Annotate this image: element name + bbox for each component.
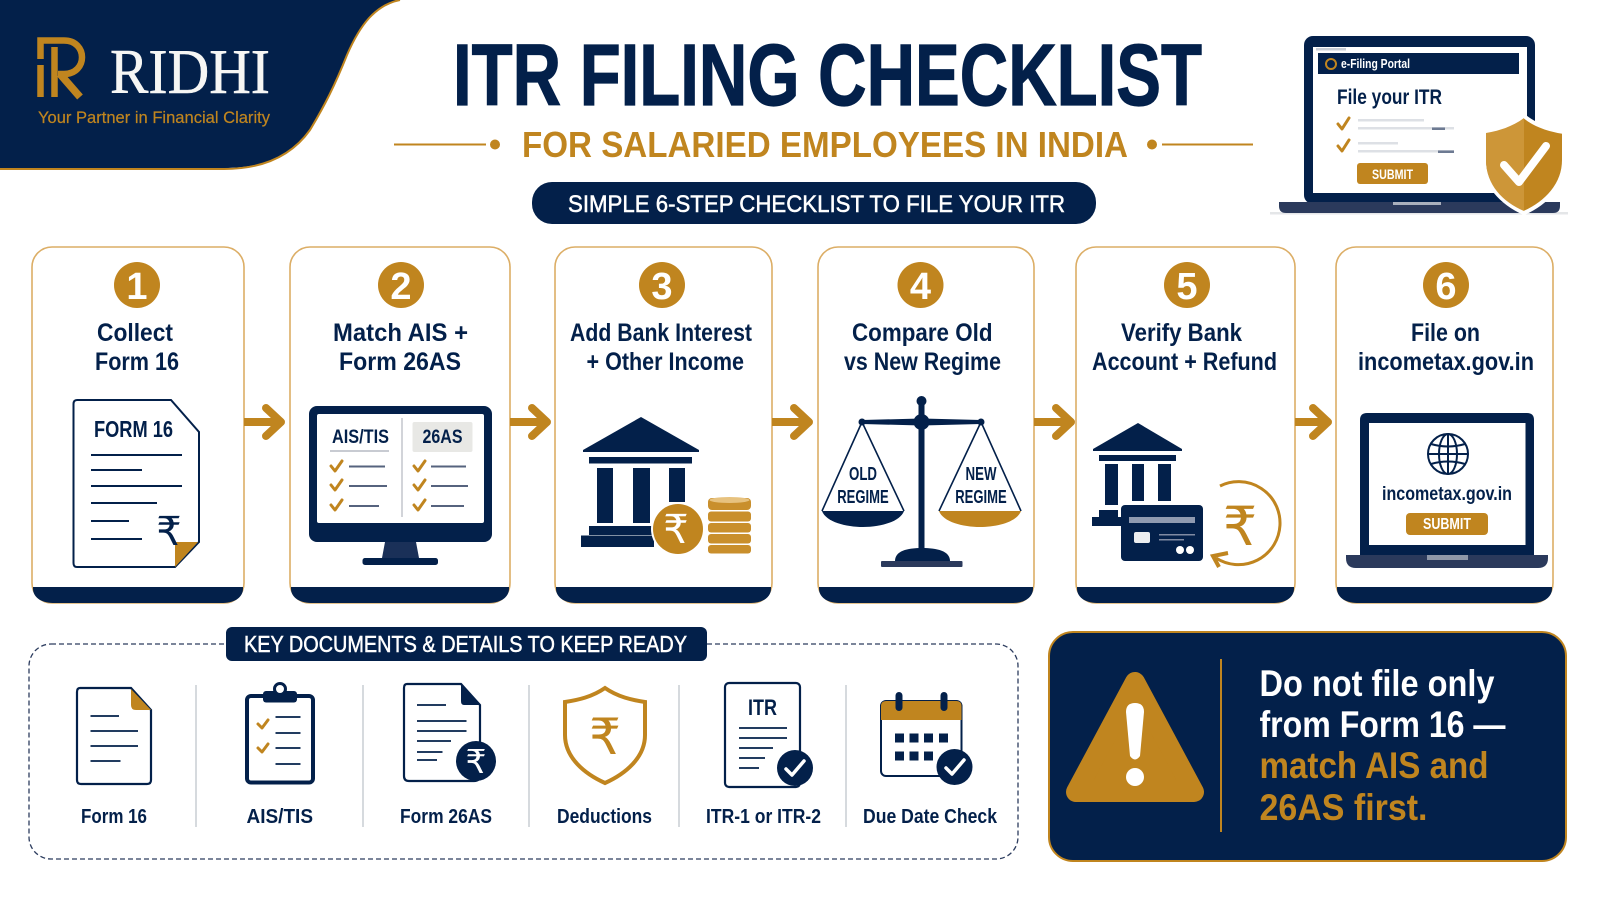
icon: warning triangle: [1076, 682, 1194, 792]
warning text: Do not file only: [1260, 663, 1495, 704]
item: form 16: Form 16: [81, 806, 147, 828]
item: ITR form: ITR: [748, 695, 777, 720]
illustration: laptop with e-filing portal and shield: e-Filing Portal: [1341, 57, 1410, 71]
heading: Form 16: [95, 348, 179, 376]
illustration: laptop with e-filing portal and shield: [1270, 36, 1568, 214]
panel: step 6: [1336, 247, 1553, 603]
heading: Collect: [97, 319, 174, 347]
item: form 16: [77, 688, 151, 828]
item: form 26AS: Form 26AS: [400, 806, 492, 828]
icon: bank, card and refund: ₹: [1223, 497, 1257, 557]
step number 5: 5: [1176, 266, 1198, 308]
title: ITR FILING CHECKLIST: [453, 27, 1202, 124]
icon: monitor comparing AIS and 26AS: AIS/TIS: [332, 427, 389, 448]
heading: Add Bank Interest: [570, 319, 753, 347]
step number 3: [639, 262, 685, 308]
icon: balance scale old vs new regime: [822, 396, 1021, 567]
illustration: laptop with e-filing portal and shield: File your ITR: [1337, 86, 1442, 109]
heading: [333, 319, 468, 376]
heading: + Other Income: [586, 348, 744, 376]
icon: laptop with income tax site: SUBMIT: [1423, 516, 1471, 533]
logo banner: [0, 0, 400, 169]
heading: vs New Regime: [844, 348, 1001, 376]
icon: bank with rupee coins: ₹: [663, 508, 689, 552]
panel: step 3: [555, 247, 772, 603]
item: form 26AS: [400, 684, 496, 828]
heading: Match AIS +: [333, 319, 468, 347]
warning text: 26AS first.: [1260, 787, 1428, 828]
heading: [570, 319, 753, 376]
icon: form 16 document: FORM 16: [94, 416, 173, 442]
icon: bank, card and refund: [1092, 423, 1280, 567]
step count pill: [532, 182, 1096, 224]
arrow 1 to 2: [244, 408, 281, 436]
heading: Verify Bank: [1121, 319, 1242, 347]
heading: [1092, 319, 1277, 376]
subtitle: FOR SALARIED EMPLOYEES IN INDIA: [522, 124, 1128, 165]
panel: step 4: [818, 247, 1034, 603]
step number 2: 2: [390, 266, 412, 308]
arrow 2 to 3: [510, 408, 547, 436]
heading: Form 26AS: [339, 348, 461, 376]
step number 2: [378, 262, 424, 308]
step number 6: 6: [1435, 266, 1457, 308]
icon: balance scale old vs new regime: REGIME: [837, 487, 889, 507]
tagline: Your Partner in Financial Clarity: [38, 108, 270, 127]
panel: warning callout: [1049, 632, 1566, 861]
item: due date check: Due Date Check: [863, 806, 998, 828]
item: AIS/TIS: [246, 684, 313, 828]
icon: monitor comparing AIS and 26AS: 26AS: [422, 427, 462, 448]
item: deductions: ₹: [589, 709, 621, 765]
arrow 3 to 4: [772, 408, 809, 436]
heading: File on: [1411, 319, 1480, 347]
panel: key documents: [29, 627, 1018, 859]
icon: laptop with income tax site: incometax.gov.in: [1382, 484, 1512, 505]
icon: form 16 document: [74, 400, 199, 567]
illustration: laptop with e-filing portal and shield: SUBMIT: [1372, 166, 1413, 182]
item: deductions: [557, 688, 652, 828]
panel: step 2: [290, 247, 510, 603]
icon: laptop with income tax site: [1346, 413, 1548, 568]
heading: [844, 319, 1001, 376]
item: deductions: Deductions: [557, 806, 652, 828]
heading: Account + Refund: [1092, 348, 1277, 376]
warning text: [1260, 663, 1506, 828]
heading: [1358, 319, 1534, 376]
icon: shield check: [1484, 116, 1564, 213]
panel: step 1: [32, 247, 244, 603]
step number 4: [898, 262, 944, 308]
icon: balance scale old vs new regime: REGIME: [955, 487, 1007, 507]
item: due date check: [863, 692, 998, 828]
heading: [95, 319, 179, 376]
warning text: from Form 16 —: [1260, 704, 1506, 745]
heading: incometax.gov.in: [1358, 348, 1534, 376]
step number 1: 1: [126, 266, 148, 308]
item: form 26AS: ₹: [466, 743, 486, 780]
icon: form 16 document: ₹: [156, 510, 182, 554]
logo mark: [40, 40, 82, 97]
item: ITR form: [706, 683, 821, 828]
section label: KEY DOCUMENTS & DETAILS TO KEEP READY: [244, 631, 687, 657]
icon: balance scale old vs new regime: NEW: [966, 464, 997, 484]
icon: globe: [1428, 434, 1468, 474]
coin stack: [708, 497, 751, 554]
icon: balance scale old vs new regime: OLD: [849, 464, 877, 484]
warning text: match AIS and: [1260, 745, 1488, 786]
brand name: RIDHI: [110, 37, 270, 107]
icon: monitor comparing AIS and 26AS: [309, 406, 492, 565]
step number 1: [114, 262, 160, 308]
step number 3: 3: [651, 266, 673, 308]
section label: [226, 627, 707, 661]
step count pill: SIMPLE 6-STEP CHECKLIST TO FILE YOUR ITR: [568, 191, 1065, 218]
step number 4: 4: [910, 266, 931, 308]
item: ITR form: ITR-1 or ITR-2: [706, 806, 821, 828]
step number 5: [1164, 262, 1210, 308]
arrow 5 to 6: [1295, 408, 1328, 436]
item: AIS/TIS: AIS/TIS: [246, 806, 313, 828]
icon: bank with rupee coins: [581, 417, 751, 556]
panel: step 5: [1076, 247, 1295, 603]
step number 6: [1423, 262, 1469, 308]
heading: Compare Old: [852, 319, 992, 347]
arrow 4 to 5: [1034, 408, 1071, 436]
